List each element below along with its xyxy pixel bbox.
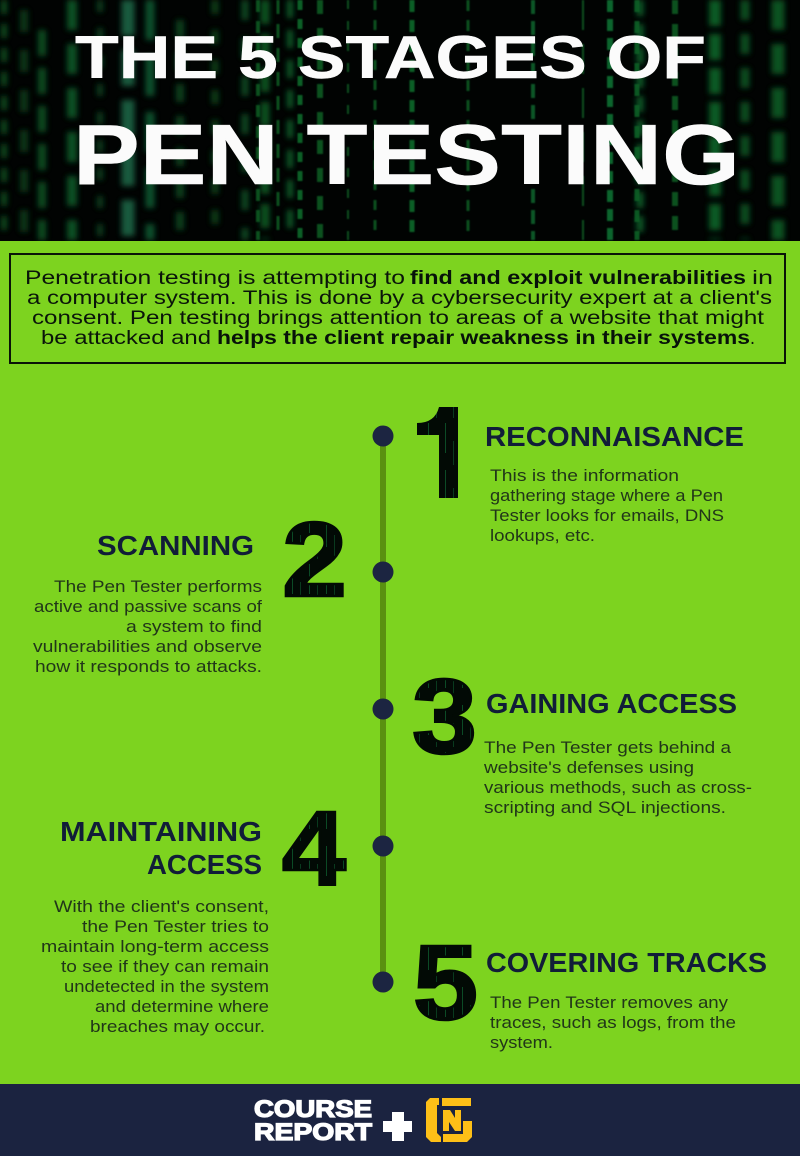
logo: Course Report: REPORT — [254, 1119, 372, 1146]
stage 5: covering tracks: COVERING TRACKS — [486, 947, 767, 978]
logo: Course Report: COURSE — [254, 1096, 372, 1123]
stage 4: maintaining access: the Pen Tester tries to — [82, 917, 269, 936]
intro text box: find and exploit vulnerabilities — [410, 268, 746, 289]
stage 4: maintaining access: breaches may occur. — [90, 1017, 265, 1036]
stage 2: scanning: 2 — [282, 501, 347, 619]
title line 2: PEN TESTING — [73, 108, 740, 203]
stage 4: maintaining access: undetected in the system — [64, 977, 269, 996]
stage 4: maintaining access: MAINTAINING — [60, 816, 262, 847]
stage 3: gaining access: The Pen Tester gets behind a — [484, 738, 732, 757]
stage 1: reconnaissance: This is the information — [490, 466, 679, 485]
stage 5: covering tracks: The Pen Tester removes any — [490, 993, 729, 1012]
stage 2: scanning: The Pen Tester performs — [54, 577, 262, 596]
stage 3: gaining access: website's defenses using — [483, 758, 694, 777]
stage 2: scanning — [33, 501, 347, 676]
footer bar — [0, 1084, 800, 1156]
intro text box: Penetration testing is attempting to — [25, 268, 405, 289]
stage 2: scanning: active and passive scans of — [34, 597, 262, 616]
stage 2: scanning: SCANNING — [97, 530, 254, 561]
stage 4: maintaining access: ACCESS — [147, 849, 262, 880]
stage 1: reconnaissance: Tester looks for emails, DNS — [490, 506, 724, 525]
stage 2: scanning: a system to find — [126, 617, 262, 636]
stage 3: gaining access: 3 — [412, 658, 477, 776]
stage 1: reconnaissance: 1 — [411, 397, 471, 518]
stage 3: gaining access — [412, 658, 752, 817]
header banner with matrix code background — [0, 0, 800, 241]
intro text box: . — [750, 328, 755, 349]
stage 1: reconnaissance — [410, 397, 744, 545]
stage 4: maintaining access: maintain long-term access — [41, 937, 269, 956]
stage 2: scanning: vulnerabilities and observe — [33, 637, 262, 656]
stage 5: covering tracks: system. — [490, 1033, 553, 1052]
logo: NG mark — [426, 1098, 472, 1142]
intro text box: a computer system. This is done by a cybersecurity expert at a client's — [27, 288, 772, 309]
intro text box — [10, 254, 785, 363]
intro text box: in — [752, 268, 773, 289]
stage 2: scanning: how it responds to attacks. — [35, 657, 262, 676]
stage 4: maintaining access — [41, 790, 346, 1036]
stage 4: maintaining access: With the client's consent, — [54, 897, 269, 916]
stage 4: maintaining access: and determine where — [95, 997, 269, 1016]
stage 5: covering tracks: traces, such as logs, from the — [490, 1013, 736, 1032]
stage 1: reconnaissance: lookups, etc. — [490, 526, 595, 545]
intro text box: be attacked and — [41, 328, 211, 349]
stage 5: covering tracks — [413, 924, 767, 1052]
intro text box: consent. Pen testing brings attention to areas of a website that might — [32, 308, 765, 329]
stage 1: reconnaissance: RECONNAISANCE — [485, 421, 744, 452]
stage 5: covering tracks: 5 — [413, 924, 478, 1042]
stage 1: reconnaissance: gathering stage where a Pen — [490, 486, 723, 505]
timeline — [372, 426, 394, 992]
stage 4: maintaining access: to see if they can remain — [61, 957, 269, 976]
logo: Course Report — [254, 1096, 372, 1146]
stage 3: gaining access: GAINING ACCESS — [486, 688, 737, 719]
icon: plus — [383, 1112, 412, 1141]
stage 4: maintaining access: 4 — [282, 790, 346, 908]
stage 3: gaining access: various methods, such as cross- — [484, 778, 752, 797]
intro text box: helps the client repair weakness in their systems — [217, 328, 750, 349]
title line 1: THE 5 STAGES OF — [75, 24, 706, 91]
stage 3: gaining access: scripting and SQL injections. — [484, 798, 726, 817]
